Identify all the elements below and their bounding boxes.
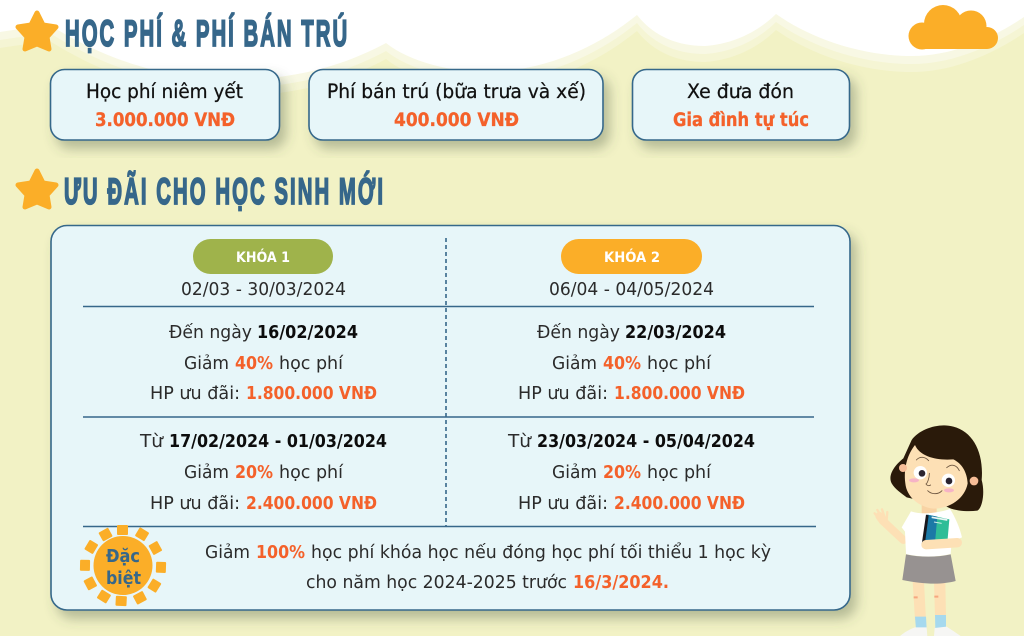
text: khóa 1 early offer: 16/02/2024 xyxy=(257,323,358,343)
icon: star heading 1 xyxy=(18,13,56,49)
text: khóa 2 later offer: 20% xyxy=(603,462,641,483)
icon: sun badge đặc biệt xyxy=(80,525,166,606)
text: khóa 2 early offer: học phí xyxy=(647,353,712,374)
panel: xe đưa đón: Xe đưa đón xyxy=(687,80,794,103)
text: khóa 2 early offer: Giảm xyxy=(552,353,597,374)
text: special offer: 16/3/2024. xyxy=(573,572,669,593)
text: special offer: 100% xyxy=(256,542,305,563)
text: khóa 2 early offer: 40% xyxy=(603,353,641,374)
badge: khóa 2: KHÓA 2 xyxy=(604,248,660,266)
heading: học phí: HỌC PHÍ & PHÍ BÁN TRÚ xyxy=(65,13,347,55)
text: khóa 1 early offer: HP ưu đãi: xyxy=(150,383,240,404)
text: dates khóa 2: 06/04 - 04/05/2024 xyxy=(549,279,714,300)
panel: học phí niêm yết: 3.000.000 VNĐ xyxy=(95,110,235,131)
text: khóa 2 later offer: Giảm xyxy=(552,462,597,483)
panel: xe đưa đón xyxy=(632,70,850,140)
panel: phí bán trú: Phí bán trú (bữa trưa và xế) xyxy=(327,80,586,103)
icon: star heading 2 xyxy=(18,171,56,207)
panel: phí bán trú xyxy=(309,70,603,140)
text: khóa 1 later offer: 17/02/2024 - 01/03/2024 xyxy=(169,432,387,452)
panel: phí bán trú: 400.000 VNĐ xyxy=(394,110,519,131)
badge: khóa 1 xyxy=(193,239,333,274)
panel: học phí niêm yết: Học phí niêm yết xyxy=(86,80,243,103)
text: khóa 1 later offer: HP ưu đãi: xyxy=(150,493,240,514)
icon: sun badge đặc biệt: Đặc xyxy=(106,546,140,567)
text: khóa 1 early offer: học phí xyxy=(279,353,344,374)
text: khóa 1 later offer: 2.400.000 VNĐ xyxy=(246,493,377,514)
badge: khóa 2 xyxy=(561,239,702,274)
text: khóa 2 later offer: học phí xyxy=(647,462,712,483)
text: khóa 2 later offer xyxy=(507,431,755,514)
icon: sun badge đặc biệt: biệt xyxy=(106,568,141,589)
panel: xe đưa đón: Gia đình tự túc xyxy=(673,110,809,131)
icon: cloud xyxy=(908,5,998,50)
text: khóa 1 early offer: Đến ngày xyxy=(169,322,252,343)
text: special offer xyxy=(205,542,771,593)
text: khóa 2 early offer: 22/03/2024 xyxy=(625,323,726,343)
text: khóa 2 later offer: 2.400.000 VNĐ xyxy=(614,493,745,514)
text: khóa 1 early offer: 1.800.000 VNĐ xyxy=(246,383,377,404)
heading: ưu đãi: ƯU ĐÃI CHO HỌC SINH MỚI xyxy=(64,171,383,213)
text: khóa 2 later offer: 23/03/2024 - 05/04/2024 xyxy=(537,432,755,452)
text: khóa 1 later offer: 20% xyxy=(235,462,273,483)
text: khóa 2 early offer: Đến ngày xyxy=(537,322,620,343)
text: dates khóa 1: 02/03 - 30/03/2024 xyxy=(181,279,346,300)
text: khóa 1 early offer xyxy=(150,322,377,404)
text: khóa 2 early offer: HP ưu đãi: xyxy=(518,383,608,404)
text: khóa 2 early offer xyxy=(518,322,745,404)
badge: khóa 1: KHÓA 1 xyxy=(236,248,290,266)
illustration: girl holding book xyxy=(875,425,983,636)
text: khóa 1 later offer xyxy=(139,431,387,514)
text: khóa 1 early offer: Giảm xyxy=(184,353,229,374)
text: special offer: cho năm học 2024-2025 trước xyxy=(306,572,567,593)
text: special offer: Giảm xyxy=(205,542,250,563)
panel: ưu đãi table xyxy=(51,226,850,610)
panel: học phí niêm yết xyxy=(50,70,280,140)
text: khóa 1 later offer: học phí xyxy=(279,462,344,483)
text: khóa 1 early offer: 40% xyxy=(235,353,273,374)
text: khóa 2 early offer: 1.800.000 VNĐ xyxy=(614,383,745,404)
text: khóa 1 later offer: Từ xyxy=(139,431,165,452)
text: special offer: học phí khóa học nếu đóng học phí tối thiểu 1 học kỳ xyxy=(311,542,771,563)
text: khóa 2 later offer: HP ưu đãi: xyxy=(518,493,608,514)
text: khóa 2 later offer: Từ xyxy=(507,431,533,452)
text: khóa 1 later offer: Giảm xyxy=(184,462,229,483)
